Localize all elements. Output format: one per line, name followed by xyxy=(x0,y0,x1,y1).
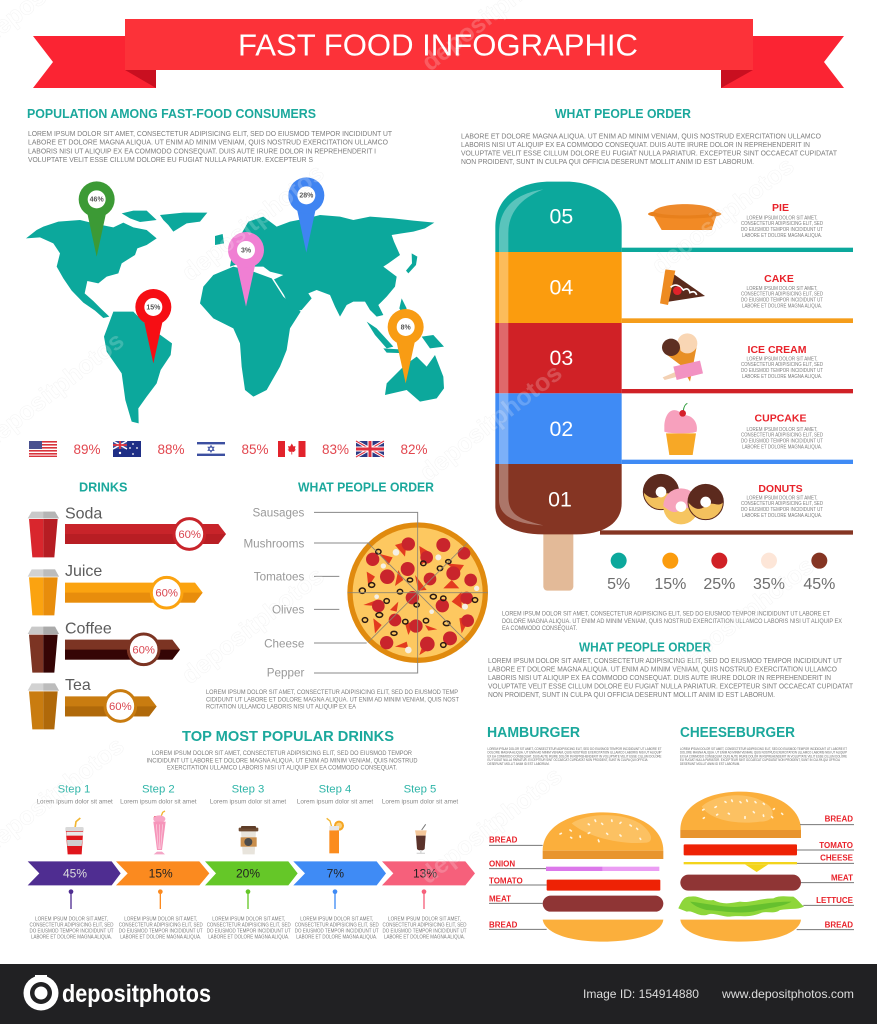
cheeseburger labels: BREAD xyxy=(825,920,853,929)
step captions: LOREM IPSUM DOLOR SIT AMET, xyxy=(212,916,285,922)
pointer lines xyxy=(314,512,418,673)
flag: Canada xyxy=(278,441,306,457)
text block: order intro: LABORIS NISI UT ALIQUIP EX EA COMMODO CONSEQUAT. DUIS AUTE IRURE DOLOR IN REPREHENDERIT IN xyxy=(461,142,810,149)
text block: hamburger description: DESERUNT MOLLIT ANIM ID EST LABORUM. xyxy=(488,762,550,766)
cup and bar: coffee: 60% xyxy=(132,644,155,656)
text block: burgers intro: VOLUPTATE VELIT ESSE CILLUM DOLORE EU FUGIAT NULLA PARIATUR. EXCEPTEUR SINT OCCAECAT CUPIDATAT xyxy=(488,682,854,690)
hamburger labels: BREAD xyxy=(489,920,518,929)
flag: USA xyxy=(29,441,57,457)
title ribbon xyxy=(33,19,844,88)
step captions: CONSECTETUR ADIPISICING ELIT, SED xyxy=(119,922,203,928)
item labels: pie, cake, ice cream, cupcake, donuts: DONUTS xyxy=(758,483,803,495)
heading: pizza what people order: WHAT PEOPLE ORDER xyxy=(298,480,434,494)
text block: hamburger description: DOLORE MAGNA ALIQUA. UT ENIM AD MINIM VENIAM, QUIS NOSTRUD EXERCITATION ULLAMCO LABORIS NISI UT ALIQUIP xyxy=(488,751,662,755)
text block: drinks intro: INCIDIDUNT UT LABORE ET DOLORE MAGNA ALIQUA. UT ENIM AD MINIM VENIAM, QUIS NOSTRUD xyxy=(146,757,418,764)
cup and bar: juice: Juice xyxy=(65,563,102,580)
pin: 46% xyxy=(79,181,115,257)
item labels: pie, cake, ice cream, cupcake, donuts: CAKE xyxy=(764,273,794,285)
step arrows: 45% xyxy=(63,867,87,881)
step captions: LABORE ET DOLORE MAGNA ALIQUA. xyxy=(296,934,377,940)
text block: burgers intro: NON PROIDENT, SUNT IN CULPA QUI OFFICIA DESERUNT MOLLIT ANIM ID EST LABORUM. xyxy=(488,690,775,699)
hamburger leader lines xyxy=(489,845,547,929)
step sublabels: Lorem ipsum dolor sit amet xyxy=(382,799,458,806)
icon: coffee cup xyxy=(239,826,258,854)
heading: population: POPULATION AMONG FAST-FOOD CONSUMERS xyxy=(27,106,316,121)
footer bar: depositphotos xyxy=(62,980,211,1008)
heading: drinks: DRINKS xyxy=(79,480,128,494)
step captions: DO EIUSMOD TEMPOR INCIDIDUNT UT xyxy=(119,928,203,934)
legend dots: 5% xyxy=(607,576,630,593)
item labels: pie, cake, ice cream, cupcake, donuts: CUPCAKE xyxy=(755,412,806,424)
heading: hamburger: HAMBURGER xyxy=(487,725,581,741)
flag: Israel xyxy=(197,441,225,457)
cup and bar: coffee xyxy=(28,620,180,673)
legend dots: 35% xyxy=(753,576,785,593)
text block: order intro xyxy=(461,133,838,166)
flag row with percentages: 82% xyxy=(400,441,428,457)
footer bar: www.depositphotos.com xyxy=(721,987,854,1001)
icon: cake xyxy=(660,269,705,305)
step arrows xyxy=(28,861,475,885)
text block: burgers intro: LABORIS NISI UT ALIQUIP EX EA COMMODO CONSEQUAT. DUIS AUTE IRURE DOLOR IN REPREHENDERIT IN xyxy=(488,673,831,682)
step labels: Step 4 xyxy=(319,783,351,795)
topping labels: Cheese xyxy=(264,637,304,650)
flag row with percentages xyxy=(29,441,428,457)
watermarks: depositphotos xyxy=(666,552,819,680)
step arrows: 15% xyxy=(149,867,173,881)
text block: order intro: LABORE ET DOLORE MAGNA ALIQUA. UT ENIM AD MINIM VENIAM, QUIS NOSTRUD EXERCITATION ULLAMCO xyxy=(461,133,822,140)
legend dots: 15% xyxy=(654,576,686,593)
heading: cheeseburger: CHEESEBURGER xyxy=(680,725,795,741)
flag row with percentages: 88% xyxy=(158,441,184,457)
step captions: CONSECTETUR ADIPISICING ELIT, SED xyxy=(382,922,467,928)
topping labels: Tomatoes xyxy=(254,571,304,584)
icon: soda cup xyxy=(65,818,84,854)
pin: 8%: 8% xyxy=(401,324,411,331)
flag: United Kingdom xyxy=(356,441,384,457)
text block: pizza caption: RCITATION ULLAMCO LABORIS NISI UT ALIQUIP EX EA xyxy=(206,704,357,711)
text block: population intro: LABORE ET DOLORE MAGNA ALIQUA. UT ENIM AD MINIM VENIAM, QUIS NOSTRUD EXERCITATION ULLAMCO xyxy=(28,140,389,147)
cheeseburger labels: MEAT xyxy=(831,873,853,882)
cup and bar: soda: 60% xyxy=(178,529,201,541)
item captions: CONSECTETUR ADIPISICING ELIT, SED xyxy=(741,501,823,507)
cup and bar: soda: Soda xyxy=(65,505,102,522)
step captions: DO EIUSMOD TEMPOR INCIDIDUNT UT xyxy=(382,928,466,934)
item labels: pie, cake, ice cream, cupcake, donuts: PIE xyxy=(772,202,789,214)
popsicle bands: 05 xyxy=(549,205,573,229)
step sublabels: Lorem ipsum dolor sit amet xyxy=(37,799,113,806)
step captions: LOREM IPSUM DOLOR SIT AMET, xyxy=(124,916,197,922)
popsicle bands: 01 xyxy=(548,488,572,512)
step sublabels: Lorem ipsum dolor sit amet xyxy=(210,799,286,806)
topping labels: Olives xyxy=(272,603,304,616)
popsicle bands xyxy=(495,182,622,534)
text block: burgers intro xyxy=(488,656,854,699)
step labels: Step 2 xyxy=(142,783,175,795)
pin: 46%: 46% xyxy=(90,197,104,204)
watermarks: depositphotos xyxy=(414,762,567,890)
pin: 3% xyxy=(228,232,264,307)
text block: cheeseburger description: DOLORE MAGNA ALIQUA. UT ENIM AD MINIM VENIAM, QUIS NOSTRUD EXERCITATION ULLAMCO LABORIS NISI UT ALIQUIP xyxy=(680,751,848,755)
cheeseburger labels: TOMATO xyxy=(819,841,853,850)
text block: order intro: VOLUPTATE VELIT ESSE CILLUM DOLORE EU FUGIAT NULLA PARIATUR. EXCEPTEUR SINT OCCAECAT CUPIDATAT xyxy=(461,150,838,157)
step arrows: 20% xyxy=(236,867,260,881)
heading: what people order (popsicle): WHAT PEOPLE ORDER xyxy=(555,107,691,121)
cheeseburger labels: BREAD xyxy=(825,815,853,824)
text block: cheeseburger description xyxy=(680,747,848,766)
cheeseburger labels xyxy=(816,815,854,929)
panel: cheeseburger diagram xyxy=(678,792,854,942)
flag row with percentages: 89% xyxy=(74,441,100,457)
step sublabels: Lorem ipsum dolor sit amet xyxy=(120,799,197,806)
legend dots: 25% xyxy=(703,576,735,593)
item labels: pie, cake, ice cream, cupcake, donuts xyxy=(748,202,807,495)
text block: pizza caption: LOREM IPSUM DOLOR SIT AMET, CONSECTETUR ADIPISICING ELIT, SED DO EIUSMOD TEMP xyxy=(206,689,459,696)
text block: drinks intro: LOREM IPSUM DOLOR SIT AMET, CONSECTETUR ADIPISICING ELIT, SED DO EIUSMOD TEMPOR xyxy=(152,750,412,757)
panel: hamburger diagram xyxy=(489,812,663,942)
text block: cheeseburger description: EU FUGIAT NULLA PARIATUR. EXCEPTEUR SINT OCCAECAT CUPIDATAT NON PROIDENT, SUNT IN CULPA QUI OFFICIA xyxy=(680,758,841,762)
item captions: DO EIUSMOD TEMPOR INCIDIDUNT UT xyxy=(741,227,823,233)
pin: 28%: 28% xyxy=(299,193,314,200)
icon: depositphotos logo xyxy=(24,975,58,1010)
step markers xyxy=(69,889,426,909)
pin: 3%: 3% xyxy=(241,247,252,254)
text block: hamburger description: EX EA COMMODO CONSEQUAT. DUIS AUTE IRURE DOLOR IN REPREHENDERIT IN VOLUPTATE VELIT ESSE CILLUM DOLORE xyxy=(488,754,662,758)
step sublabels xyxy=(37,799,458,806)
icon: cupcake xyxy=(664,403,697,455)
text block: pizza caption xyxy=(206,689,459,711)
item labels: pie, cake, ice cream, cupcake, donuts: ICE CREAM xyxy=(748,344,807,356)
step captions: DO EIUSMOD TEMPOR INCIDIDUNT UT xyxy=(295,928,379,934)
step captions: LABORE ET DOLORE MAGNA ALIQUA. xyxy=(120,934,201,940)
cup and bar: juice xyxy=(28,563,203,615)
popsicle bands: 03 xyxy=(549,346,573,370)
heading: what people order (burgers): WHAT PEOPLE ORDER xyxy=(579,640,711,654)
hamburger labels: TOMATO xyxy=(489,876,523,885)
item captions: CONSECTETUR ADIPISICING ELIT, SED xyxy=(741,362,823,368)
step sublabels: Lorem ipsum dolor sit amet xyxy=(297,799,373,806)
item captions: DO EIUSMOD TEMPOR INCIDIDUNT UT xyxy=(741,298,823,304)
step labels: Step 1 xyxy=(58,783,90,795)
step captions: CONSECTETUR ADIPISICING ELIT, SED xyxy=(207,922,291,928)
heading: top most popular drinks: TOP MOST POPULAR DRINKS xyxy=(182,728,394,745)
text block: population intro: VOLUPTATE VELIT ESSE CILLUM DOLORE EU FUGIAT NULLA PARIATUR. EXCEPTEUR S xyxy=(28,157,313,164)
text block: hamburger description: LOREM IPSUM DOLOR SIT AMET, CONSECTETUR ADIPISICING ELIT, SED DO EIUSMOD TEMPOR INCIDIDUNT UT LABORE ET xyxy=(488,747,662,751)
step labels xyxy=(58,783,436,795)
cup and bar: tea: 60% xyxy=(109,701,132,713)
item captions: DO EIUSMOD TEMPOR INCIDIDUNT UT xyxy=(741,507,823,513)
flag: Australia xyxy=(113,441,141,457)
text block: drinks intro: EXERCITATION ULLAMCO LABORIS NISI UT ALIQUIP EX EA COMMODO CONSEQUAT. xyxy=(167,765,397,772)
step captions: LABORE ET DOLORE MAGNA ALIQUA. xyxy=(208,934,289,940)
legend dots: 45% xyxy=(803,576,835,593)
step captions xyxy=(30,916,467,940)
step captions: LOREM IPSUM DOLOR SIT AMET, xyxy=(35,916,108,922)
pin: 8% xyxy=(388,309,424,383)
text block: popsicle caption xyxy=(502,610,842,632)
cheeseburger leader lines xyxy=(797,825,854,930)
cheeseburger labels: CHEESE xyxy=(820,854,854,863)
footer bar xyxy=(0,964,877,1024)
item captions: LOREM IPSUM DOLOR SIT AMET, xyxy=(746,286,818,292)
step captions: LABORE ET DOLORE MAGNA ALIQUA. xyxy=(384,934,465,940)
item captions: LOREM IPSUM DOLOR SIT AMET, xyxy=(746,356,818,362)
topping labels: Sausages xyxy=(252,506,304,519)
step captions: DO EIUSMOD TEMPOR INCIDIDUNT UT xyxy=(207,928,291,934)
icon: milkshake xyxy=(153,811,166,854)
hamburger labels: MEAT xyxy=(489,894,511,903)
popsicle bands: 04 xyxy=(549,275,573,299)
item captions xyxy=(741,216,823,519)
item captions: LOREM IPSUM DOLOR SIT AMET, xyxy=(746,496,818,502)
item captions: CONSECTETUR ADIPISICING ELIT, SED xyxy=(741,433,823,439)
title ribbon: FAST FOOD INFOGRAPHIC xyxy=(238,28,638,62)
hamburger labels: ONION xyxy=(489,859,515,868)
text block: population intro xyxy=(28,131,393,164)
world map with location pins xyxy=(26,177,444,423)
panel: drinks bars xyxy=(28,505,226,729)
text block: pizza caption: CIDIDUNT UT LABORE ET DOLORE MAGNA ALIQUA. UT ENIM AD MINIM VENIAM, QUIS NOST xyxy=(206,696,459,703)
cheeseburger layers xyxy=(678,792,804,942)
pin: 28% xyxy=(288,177,324,253)
flag row with percentages: 85% xyxy=(242,441,268,457)
panel: pizza toppings diagram xyxy=(243,506,488,680)
pin: 15% xyxy=(135,289,171,363)
pizza xyxy=(347,522,488,663)
item captions: DO EIUSMOD TEMPOR INCIDIDUNT UT xyxy=(741,368,823,374)
topping labels: Mushrooms xyxy=(243,538,304,551)
step captions: LOREM IPSUM DOLOR SIT AMET, xyxy=(388,916,461,922)
step arrows: 13% xyxy=(413,867,437,881)
text block: popsicle caption: EA COMMODO CONSEQUAT. xyxy=(502,625,577,632)
text block: drinks intro xyxy=(146,750,418,772)
step captions: LOREM IPSUM DOLOR SIT AMET, xyxy=(300,916,373,922)
icon: iced latte xyxy=(415,824,427,854)
text block: burgers intro: LOREM IPSUM DOLOR SIT AMET, CONSECTETUR ADIPISICING ELIT, SED DO EIUSMOD TEMPOR INCIDIDUNT UT xyxy=(488,656,843,665)
step labels: Step 5 xyxy=(404,783,436,795)
popsicle stick xyxy=(543,523,573,591)
icon: ice cream xyxy=(662,333,703,382)
item captions: LABORE ET DOLORE MAGNA ALIQUA. xyxy=(742,513,822,519)
text block: hamburger description: EU FUGIAT NULLA PARIATUR. EXCEPTEUR SINT OCCAECAT CUPIDATAT NON PROIDENT, SUNT IN CULPA QUI OFFICIA xyxy=(488,758,648,762)
item captions: LABORE ET DOLORE MAGNA ALIQUA. xyxy=(742,444,822,450)
icon: pie xyxy=(648,204,721,230)
step captions: CONSECTETUR ADIPISICING ELIT, SED xyxy=(295,922,379,928)
cup and bar: juice: 60% xyxy=(155,588,178,600)
cup and bar: soda xyxy=(28,505,226,557)
text block: cheeseburger description: DESERUNT MOLLIT ANIM ID EST LABORUM. xyxy=(680,762,740,766)
item captions: LABORE ET DOLORE MAGNA ALIQUA. xyxy=(742,303,822,309)
item captions: LABORE ET DOLORE MAGNA ALIQUA. xyxy=(742,233,822,239)
watermarks: depositphotos xyxy=(176,562,329,690)
cup and bar: coffee: Coffee xyxy=(65,620,112,637)
popsicle bands: 02 xyxy=(549,417,573,441)
hamburger labels: BREAD xyxy=(489,835,518,844)
item captions: LOREM IPSUM DOLOR SIT AMET, xyxy=(746,216,818,222)
text block: burgers intro: LABORE ET DOLORE MAGNA ALIQUA. UT ENIM AD MINIM VENIAM, QUIS NOSTRUD EXERCITATION ULLAMCO xyxy=(488,664,837,674)
pin: 15%: 15% xyxy=(146,304,161,311)
step arrows: 7% xyxy=(327,867,344,881)
icon: orange juice xyxy=(327,818,344,853)
item captions: LABORE ET DOLORE MAGNA ALIQUA. xyxy=(742,374,822,380)
text block: cheeseburger description: LOREM IPSUM DOLOR SIT AMET, CONSECTETUR ADIPISICING ELIT, SED DO EIUSMOD TEMPOR INCIDIDUNT UT LABORE ET xyxy=(680,747,847,751)
watermarks: depositphotos xyxy=(176,159,329,287)
step captions: DO EIUSMOD TEMPOR INCIDIDUNT UT xyxy=(30,928,114,934)
item captions: DO EIUSMOD TEMPOR INCIDIDUNT UT xyxy=(741,438,823,444)
icon: donuts xyxy=(643,474,723,524)
step captions: LABORE ET DOLORE MAGNA ALIQUA. xyxy=(31,934,112,940)
panel: drinks steps timeline xyxy=(28,783,475,909)
hamburger labels xyxy=(489,835,523,929)
divider bars xyxy=(600,248,853,535)
text block: order intro: NON PROIDENT, SUNT IN CULPA QUI OFFICIA DESERUNT MOLLIT ANIM ID EST LABORUM. xyxy=(461,159,754,166)
watermarks: depositphotos xyxy=(646,152,799,280)
watermarks: depositphotos xyxy=(414,359,567,487)
item captions: CONSECTETUR ADIPISICING ELIT, SED xyxy=(741,292,823,298)
topping labels xyxy=(243,506,304,680)
legend dots xyxy=(607,553,835,593)
text block: hamburger description xyxy=(488,747,662,766)
item captions: CONSECTETUR ADIPISICING ELIT, SED xyxy=(741,221,823,227)
footer bar: Image ID: 154914880 xyxy=(583,987,699,1001)
panel: popsicle chart xyxy=(495,182,853,593)
hamburger layers xyxy=(543,812,663,942)
cheeseburger labels: LETTUCE xyxy=(816,896,854,905)
text block: population intro: LOREM IPSUM DOLOR SIT AMET, CONSECTETUR ADIPISICING ELIT, SED DO EIUSMOD TEMPOR INCIDIDUNT UT xyxy=(28,131,393,138)
step labels: Step 3 xyxy=(232,783,264,795)
cup and bar: tea: Tea xyxy=(65,677,91,694)
text block: population intro: LABORIS NISI UT ALIQUIP EX EA COMMODO CONSEQUAT. DUIS AUTE IRURE DOLOR IN REPREHENDERIT I xyxy=(28,148,376,155)
cup and bar: tea xyxy=(28,677,157,729)
item captions: LOREM IPSUM DOLOR SIT AMET, xyxy=(746,427,818,433)
topping labels: Pepper xyxy=(267,667,304,680)
step captions: CONSECTETUR ADIPISICING ELIT, SED xyxy=(30,922,114,928)
flag row with percentages: 83% xyxy=(322,441,349,457)
